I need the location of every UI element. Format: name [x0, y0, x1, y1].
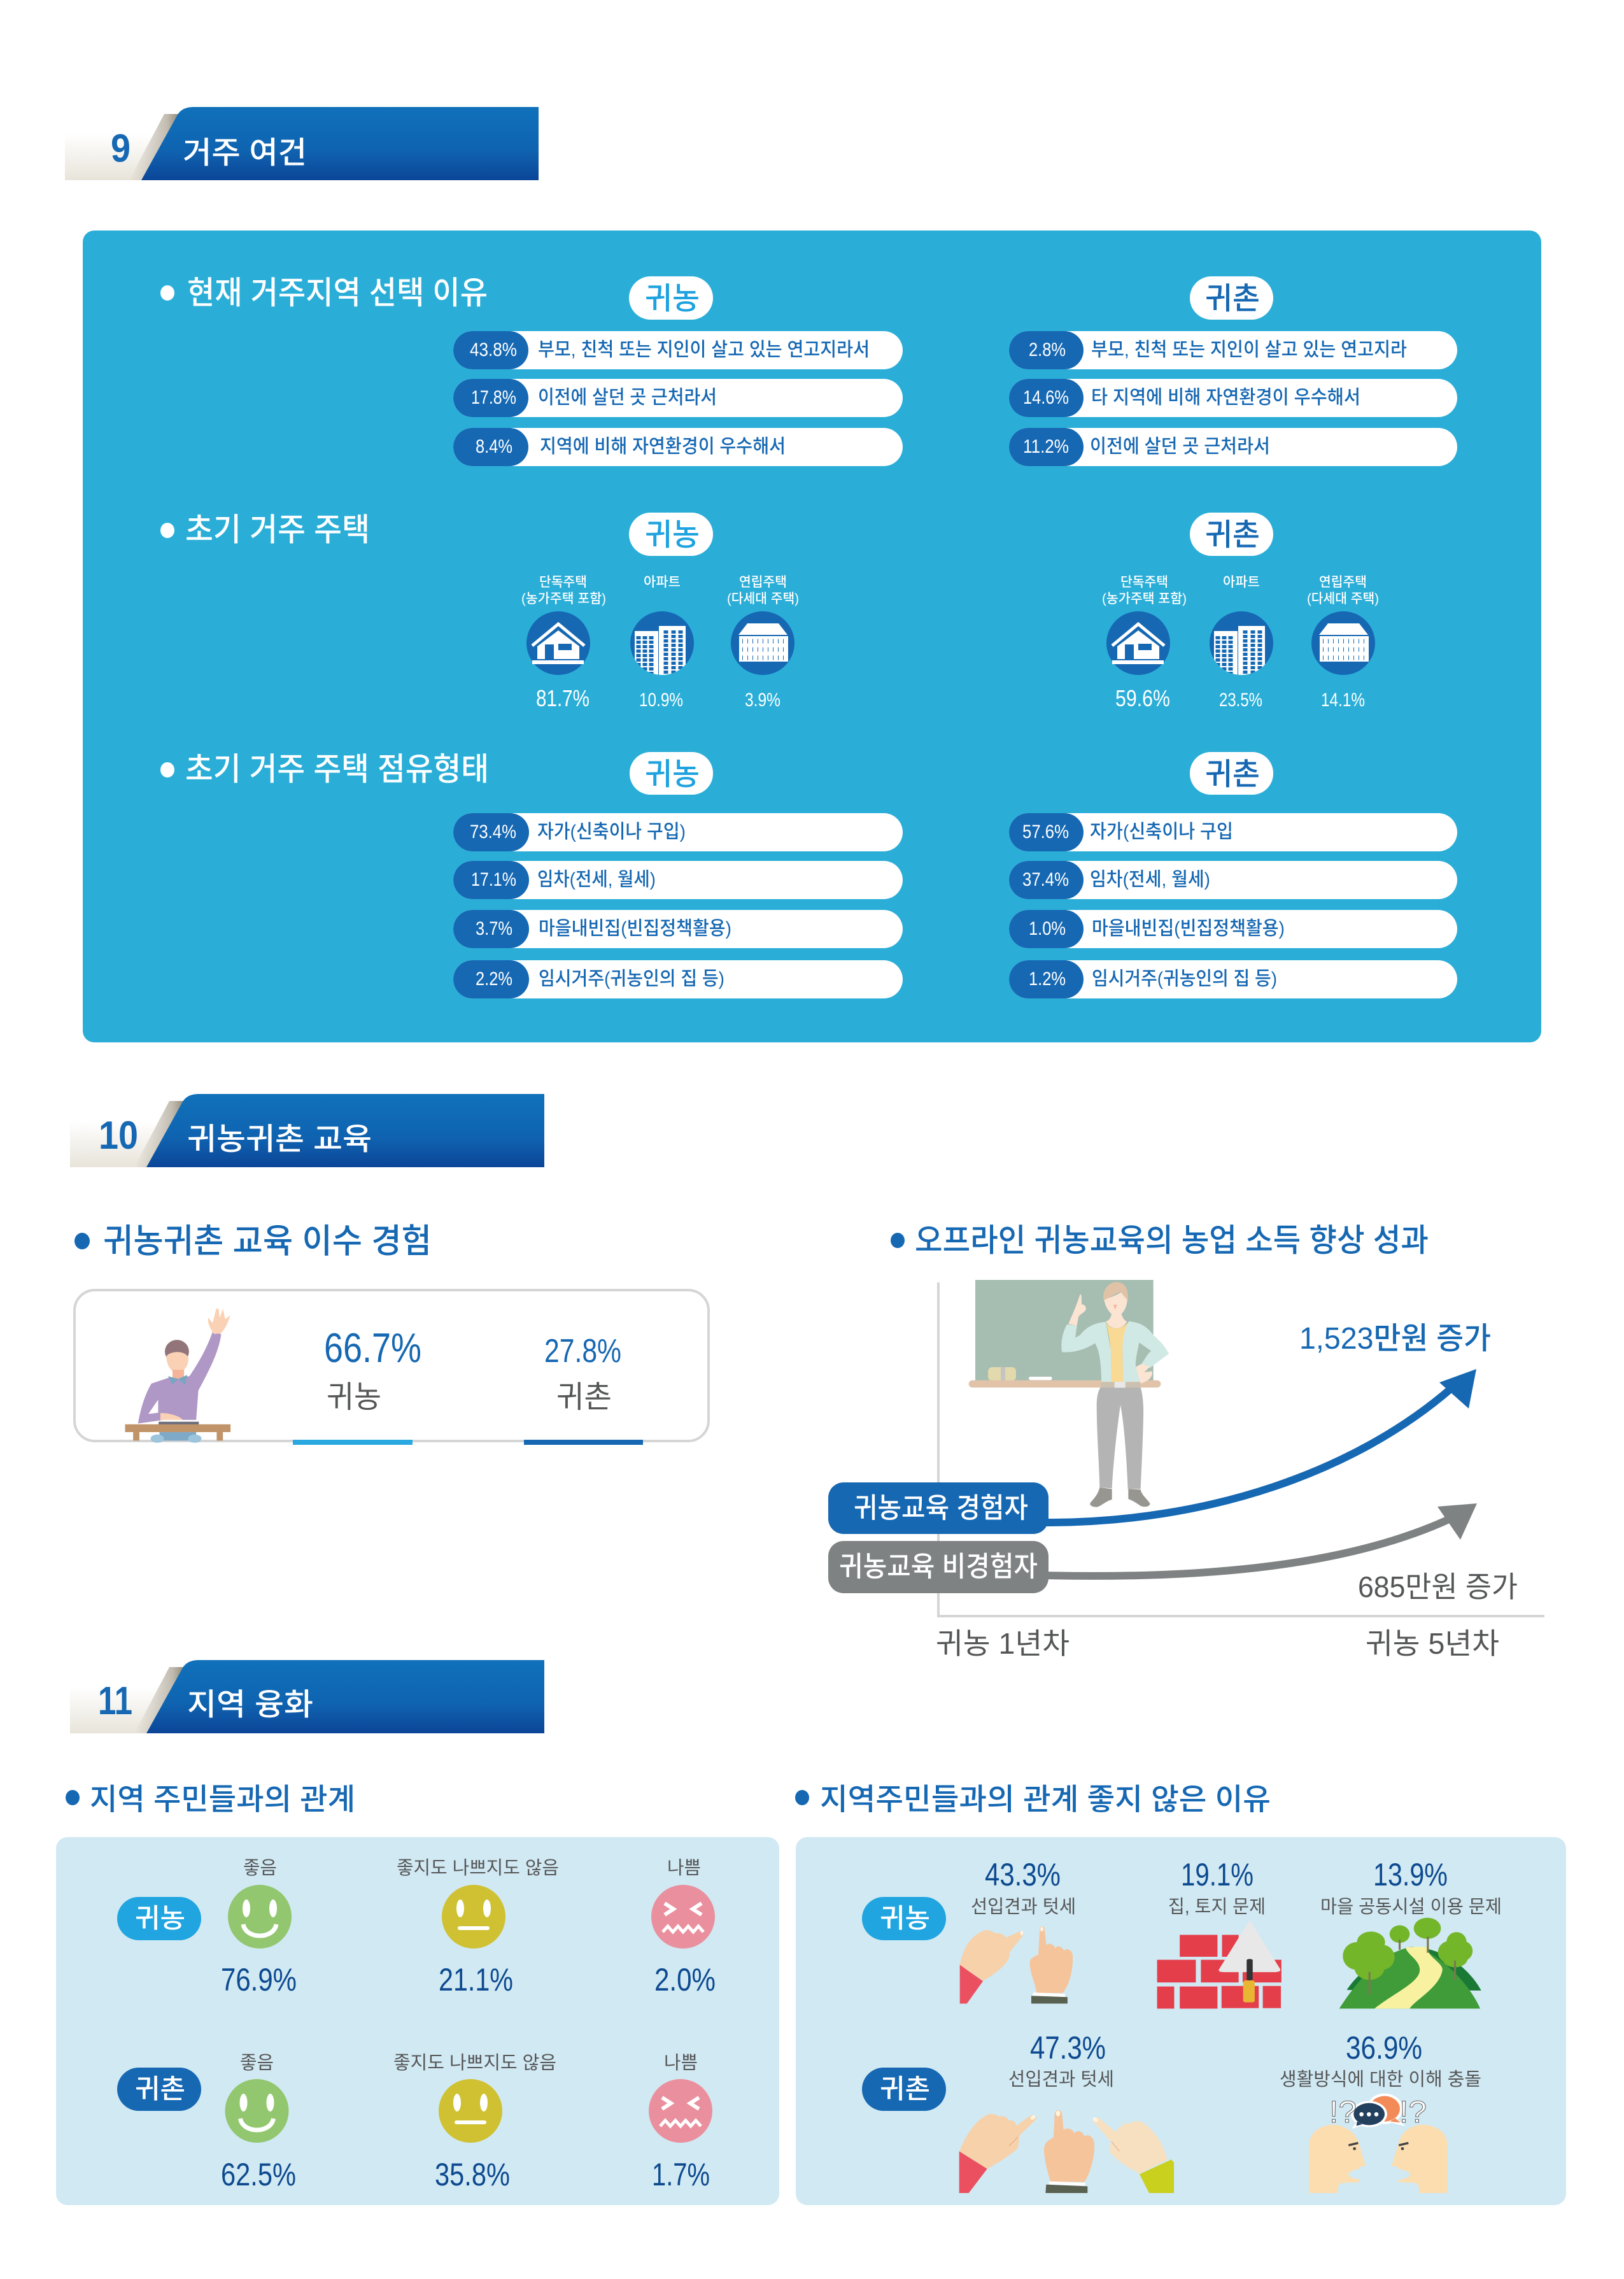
- housing type labels 귀촌: [1102, 575, 1379, 606]
- list: reasons 귀촌: [1009, 331, 1457, 466]
- row: 귀촌 labels: 좋지도 나쁘지도 않음: [393, 2053, 556, 2073]
- item 57.6%: [1009, 813, 1457, 851]
- heading: 현재 거주지역 선택 이유: 현재 거주지역 선택 이유: [187, 275, 488, 311]
- item 73.4%: [453, 813, 903, 851]
- housing type values: 23.5%: [1219, 690, 1262, 711]
- item 1.0%: 1.0%: [1029, 918, 1066, 939]
- item 1.2%: 임시거주(귀농인의 집 등): [1092, 969, 1277, 990]
- arrow: gray growth curve: [1044, 1503, 1477, 1576]
- badge: 귀농: 귀농: [880, 1903, 930, 1933]
- item 11.2%: [1009, 428, 1457, 466]
- item 2.8%: [1009, 331, 1457, 369]
- row: 귀촌 values: 35.8%: [435, 2157, 510, 2192]
- housing type labels 귀촌: (농가주택 포함): [1102, 592, 1187, 606]
- item 1.2%: 1.2%: [1029, 969, 1066, 990]
- item 17.8%: 이전에 살던 곳 근처라서: [538, 387, 717, 408]
- badge: 귀촌: 귀촌: [1205, 758, 1260, 792]
- item 3.7%: 마을내빈집(빈집정책활용): [539, 918, 731, 939]
- chart: income growth: [828, 1280, 1544, 1660]
- item 3.7%: 3.7%: [476, 918, 512, 939]
- icon: pointing hands 귀농: [960, 1926, 1073, 2003]
- icon: apartment 귀농: [630, 611, 694, 676]
- stat: 귀촌 27.8%: 27.8%: [544, 1333, 621, 1370]
- item 17.1%: 17.1%: [471, 869, 516, 890]
- badge: 귀농: [117, 1897, 201, 1940]
- housing type values: [536, 685, 1365, 711]
- item 73.4%: 자가(신축이나 구입): [537, 821, 686, 842]
- item 14.6%: 14.6%: [1023, 387, 1069, 408]
- heading: 초기 거주 주택 점유형태: 초기 거주 주택 점유형태: [185, 751, 489, 787]
- housing type labels 귀촌: 연립주택: [1319, 575, 1367, 590]
- housing type labels 귀농: 연립주택: [739, 575, 787, 590]
- housing type labels 귀농: 단독주택: [539, 575, 587, 590]
- item 1.0%: [1009, 910, 1457, 948]
- badge: 귀촌: [1190, 513, 1273, 556]
- item 57.6%: 자가(신축이나 구입: [1090, 821, 1233, 842]
- badge: 귀농: 귀농: [645, 758, 700, 792]
- heading: 지역 주민들과의 관계: 지역 주민들과의 관계: [90, 1782, 355, 1816]
- item 14.6%: [1009, 379, 1457, 417]
- illustration: teacher at chalkboard: [969, 1280, 1169, 1507]
- badge: 귀농: 귀농: [645, 282, 700, 316]
- badge: 귀촌: [1190, 752, 1273, 795]
- axis label: 귀농 5년차: 귀농 5년차: [1366, 1627, 1499, 1660]
- header: section 10: [70, 1094, 544, 1167]
- list: reasons 귀농: [453, 331, 903, 466]
- housing type labels 귀촌: 단독주택: [1120, 575, 1168, 590]
- icon: bad face 귀촌: [649, 2079, 712, 2143]
- stat: 47.3% 선입견과 텃세: [1008, 2030, 1114, 2090]
- housing type values: 81.7%: [536, 685, 590, 711]
- badge: 귀촌: 귀촌: [135, 2074, 185, 2104]
- number 10: 10: [99, 1114, 138, 1158]
- icon: good face 귀농: [228, 1885, 292, 1949]
- stat: 43.3% 선입견과 텃세: [971, 1857, 1076, 1917]
- item 11.2%: 이전에 살던 곳 근처라서: [1090, 436, 1270, 457]
- item 37.4%: 임차(전세, 월세): [1090, 869, 1210, 890]
- icon: detached house 귀촌: [1106, 611, 1170, 675]
- icon: apartment 귀촌: [1210, 611, 1273, 676]
- stat: 19.1% 집, 토지 문제: 집, 토지 문제: [1168, 1897, 1266, 1917]
- row: 귀농 values: 76.9%: [221, 1962, 297, 1998]
- stat: 36.9% 생활방식에 대한 이해 충돌: [1280, 2030, 1481, 2090]
- icon: two people arguing: [1309, 2094, 1447, 2193]
- number 11: 11: [98, 1679, 132, 1723]
- panel: relationship with residents: [56, 1837, 779, 2205]
- row: 귀농 labels: [243, 1858, 701, 1878]
- stat: 13.9% 마을 공동시설 이용 문제: 13.9%: [1373, 1857, 1448, 1892]
- row: 귀촌 values: [221, 2157, 710, 2192]
- row: 귀농 values: 21.1%: [439, 1962, 513, 1998]
- icon: detached house 귀농: [526, 611, 590, 675]
- item 17.1%: [453, 861, 903, 899]
- item 17.8%: 17.8%: [471, 387, 516, 408]
- housing type labels 귀농: [521, 575, 799, 606]
- housing type values: 14.1%: [1321, 690, 1365, 711]
- list: tenure 귀농: [453, 813, 903, 998]
- housing type labels 귀촌: 아파트: [1223, 575, 1260, 590]
- row: 귀농 labels: 좋음: [243, 1858, 277, 1878]
- item 1.2%: [1009, 960, 1457, 998]
- title: 거주 여건: 거주 여건: [183, 136, 307, 170]
- header: section 9: [65, 107, 539, 180]
- badge: 귀농: [629, 276, 713, 320]
- label: 귀농교육 비경험자: [828, 1541, 1049, 1593]
- icon: neutral face 귀농: [442, 1885, 505, 1949]
- icon: hill with trees: [1339, 1918, 1481, 2008]
- badge: 귀촌: 귀촌: [1205, 282, 1260, 316]
- stat: 36.9% 생활방식에 대한 이해 충돌: 36.9%: [1346, 2030, 1422, 2066]
- stat: 귀농 66.7%: [293, 1324, 421, 1445]
- axis label: 귀농 1년차: 귀농 1년차: [936, 1627, 1070, 1660]
- icon: two people arguing: !?: [1329, 2096, 1357, 2129]
- row: 귀촌 values: 62.5%: [221, 2157, 296, 2192]
- item 8.4%: [453, 428, 903, 466]
- stat: 귀농 66.7%: 66.7%: [324, 1324, 421, 1371]
- icon: good face 귀촌: [225, 2079, 289, 2143]
- icon: neutral face 귀촌: [439, 2079, 502, 2143]
- housing type labels 귀촌: (다세대 주택): [1307, 592, 1379, 606]
- icon: two people arguing: !?: [1399, 2096, 1427, 2129]
- list: tenure 귀촌: [1009, 813, 1457, 998]
- value: 685만원 증가: 685만원 증가: [1358, 1570, 1518, 1603]
- label: 귀농교육 비경험자: 귀농교육 비경험자: [839, 1551, 1038, 1582]
- value: 1,523만원 증가: 1,523만원 증가: [1299, 1322, 1491, 1356]
- stat: 36.9% 생활방식에 대한 이해 충돌: 생활방식에 대한 이해 충돌: [1280, 2069, 1481, 2090]
- arrow: blue growth curve: [1044, 1369, 1476, 1523]
- item 2.2%: 2.2%: [476, 969, 512, 990]
- badge: 귀농: 귀농: [135, 1903, 185, 1933]
- item 8.4%: 지역에 비해 자연환경이 우수해서: [540, 436, 786, 457]
- badge: 귀촌: [117, 2068, 201, 2111]
- stat: 47.3% 선입견과 텃세: 47.3%: [1030, 2030, 1106, 2066]
- icon: row house 귀농: [731, 611, 794, 675]
- row: 귀농 labels: 나쁨: [667, 1858, 701, 1878]
- badge: 귀농: [862, 1897, 946, 1940]
- item 17.8%: [453, 379, 903, 417]
- item 37.4%: [1009, 861, 1457, 899]
- item 14.6%: 타 지역에 비해 자연환경이 우수해서: [1091, 387, 1360, 408]
- badge: 귀촌: 귀촌: [880, 2074, 930, 2104]
- panel: housing conditions: [83, 231, 1541, 1042]
- item 8.4%: 8.4%: [476, 436, 512, 457]
- label: 귀농교육 경험자: [828, 1482, 1049, 1534]
- badge: 귀촌: [862, 2068, 946, 2111]
- housing type values: 10.9%: [639, 690, 683, 711]
- icon: bad face 귀농: [651, 1885, 715, 1949]
- icon: pointing hands 귀촌: [959, 2110, 1174, 2193]
- row: 귀촌 labels: 나쁨: [664, 2053, 698, 2073]
- row: 귀농 values: [221, 1962, 716, 1998]
- heading: 초기 거주 주택: 초기 거주 주택: [185, 512, 370, 548]
- row: 귀촌 labels: [240, 2053, 698, 2073]
- item 57.6%: 57.6%: [1022, 821, 1069, 842]
- title: 지역 융화: 지역 융화: [187, 1688, 313, 1722]
- heading: 귀농귀촌 교육 이수 경험: 귀농귀촌 교육 이수 경험: [103, 1223, 432, 1260]
- housing type values: 59.6%: [1115, 685, 1170, 711]
- stat: 귀촌 27.8%: 귀촌: [556, 1381, 612, 1414]
- stat: 13.9% 마을 공동시설 이용 문제: [1320, 1857, 1502, 1917]
- icon: bricks and trowel: [1157, 1920, 1282, 2008]
- stat: 47.3% 선입견과 텃세: 선입견과 텃세: [1008, 2069, 1114, 2090]
- badge: 귀촌: [1190, 276, 1273, 320]
- heading: 오프라인 귀농교육의 농업 소득 향상 성과: 오프라인 귀농교육의 농업 소득 향상 성과: [915, 1223, 1429, 1258]
- housing type labels 귀농: 아파트: [644, 575, 681, 590]
- row: 귀촌 labels: 좋음: [240, 2053, 274, 2073]
- item 43.8%: [453, 331, 903, 369]
- badge: 귀농: [629, 513, 713, 556]
- stat: 43.3% 선입견과 텃세: 선입견과 텃세: [971, 1896, 1076, 1917]
- illustration: student raising hand: [125, 1309, 230, 1443]
- badge: 귀농: 귀농: [645, 518, 700, 552]
- row: 귀농 values: 2.0%: [654, 1962, 716, 1998]
- title: 귀농귀촌 교육: 귀농귀촌 교육: [187, 1123, 372, 1156]
- stat: 43.3% 선입견과 텃세: 43.3%: [985, 1857, 1061, 1892]
- label: 귀농교육 경험자: 귀농교육 경험자: [854, 1493, 1028, 1524]
- item 43.8%: 43.8%: [470, 339, 517, 360]
- housing type values: 3.9%: [745, 690, 780, 711]
- housing type labels 귀농: (농가주택 포함): [521, 592, 606, 606]
- icon: row house 귀촌: [1311, 611, 1375, 675]
- item 17.1%: 임차(전세, 월세): [537, 869, 656, 890]
- item 43.8%: 부모, 친척 또는 지인이 살고 있는 연고지라서: [538, 339, 870, 360]
- item 1.0%: 마을내빈집(빈집정책활용): [1092, 918, 1285, 939]
- row: 귀촌 values: 1.7%: [652, 2157, 710, 2192]
- header: section 11: [70, 1660, 544, 1733]
- housing type labels 귀농: (다세대 주택): [727, 592, 799, 606]
- panel: education experience: [74, 1290, 709, 1445]
- heading: 지역주민들과의 관계 좋지 않은 이유: 지역주민들과의 관계 좋지 않은 이유: [820, 1782, 1271, 1816]
- item 37.4%: 37.4%: [1022, 869, 1069, 890]
- item 3.7%: [453, 910, 903, 948]
- item 2.8%: 부모, 친척 또는 지인이 살고 있는 연고지라: [1091, 339, 1407, 360]
- item 2.2%: 임시거주(귀농인의 집 등): [539, 969, 724, 990]
- row: 귀농 labels: 좋지도 나쁘지도 않음: [397, 1858, 559, 1878]
- stat: 19.1% 집, 토지 문제: [1168, 1857, 1266, 1917]
- item 11.2%: 11.2%: [1023, 436, 1069, 457]
- badge: 귀농: [630, 752, 713, 795]
- stat: 13.9% 마을 공동시설 이용 문제: 마을 공동시설 이용 문제: [1320, 1897, 1502, 1917]
- stat: 귀촌 27.8%: [524, 1333, 643, 1445]
- panel: reasons for poor relationship: [796, 1837, 1566, 2205]
- stat: 19.1% 집, 토지 문제: 19.1%: [1181, 1857, 1253, 1892]
- item 73.4%: 73.4%: [470, 821, 516, 842]
- badge: 귀촌: 귀촌: [1205, 518, 1260, 552]
- item 2.2%: [453, 960, 903, 998]
- item 2.8%: 2.8%: [1029, 339, 1066, 360]
- number 9: 9: [111, 127, 131, 171]
- stat: 귀농 66.7%: 귀농: [327, 1381, 381, 1414]
